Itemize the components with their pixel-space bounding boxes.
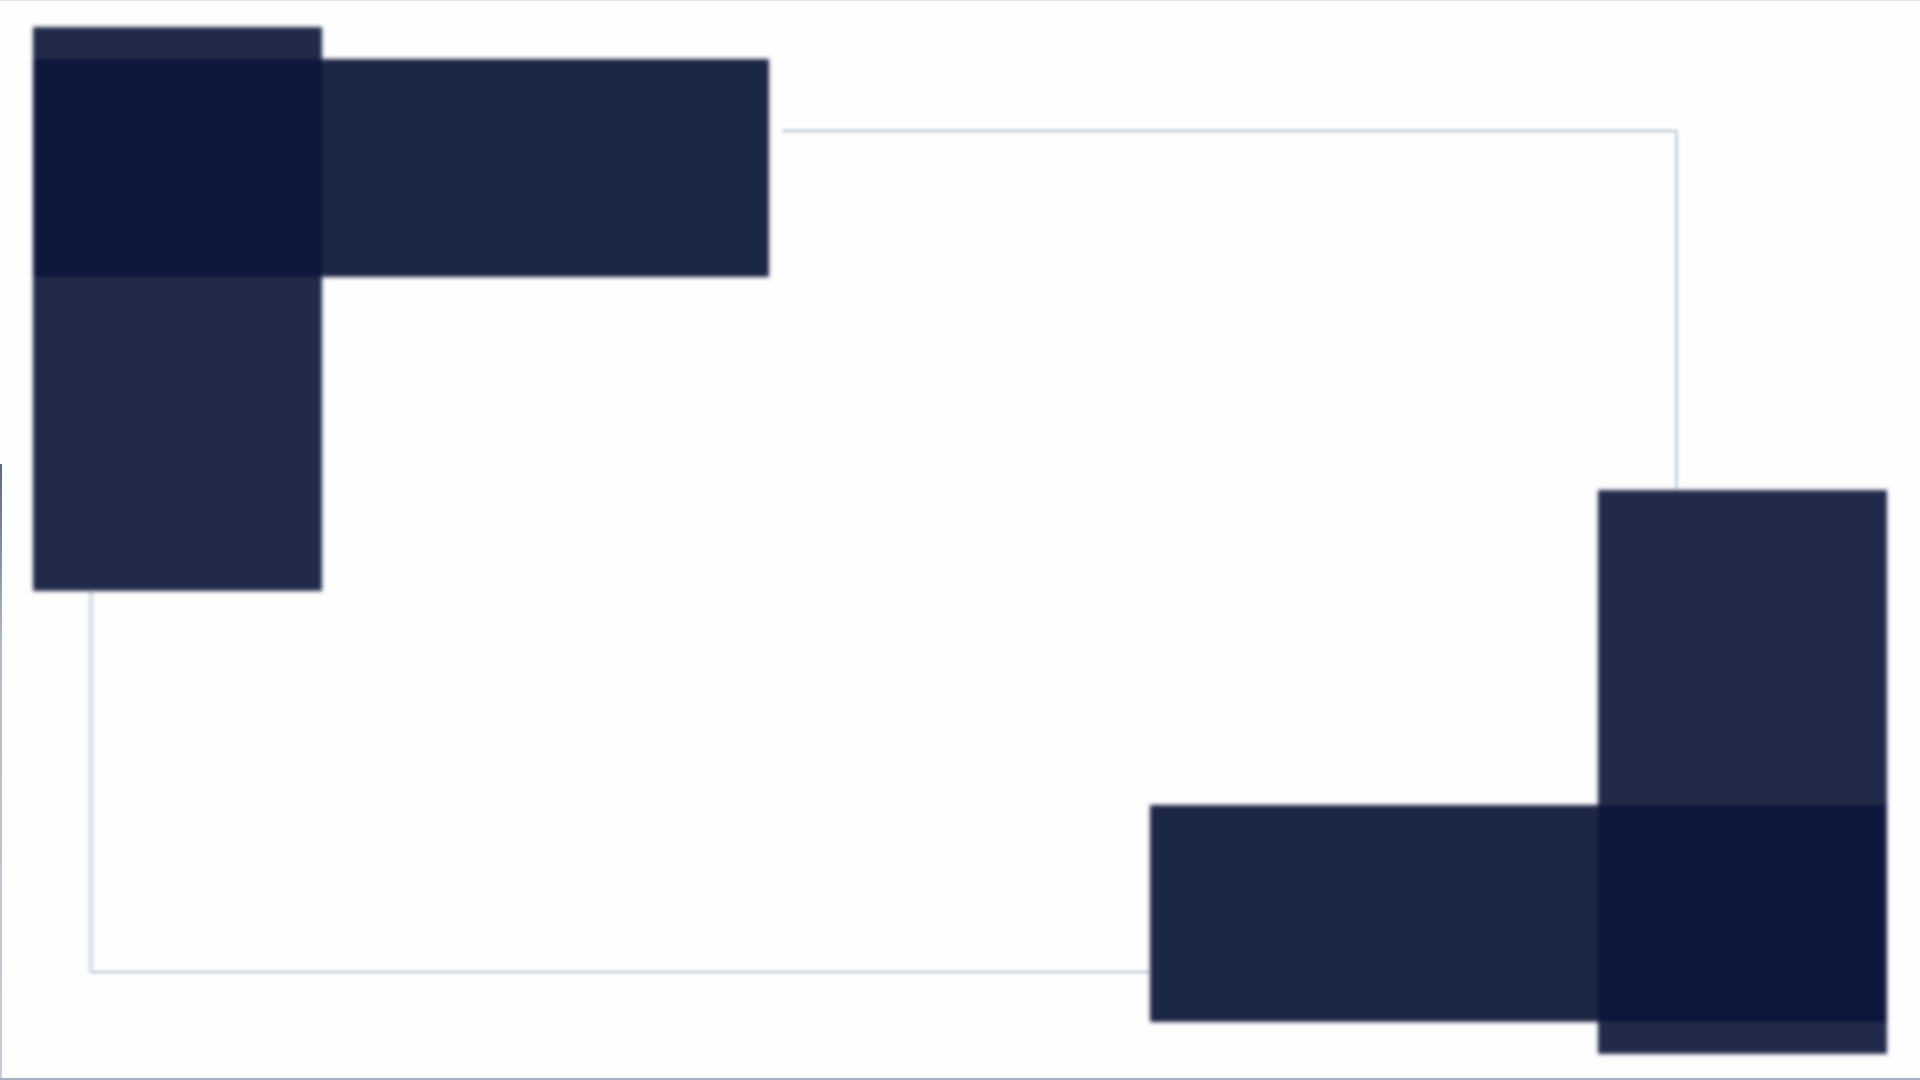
horizontal bar, bottom right	[1150, 805, 1598, 1022]
bottom-right corner block	[1150, 490, 1887, 1054]
top edge line	[0, 0, 1920, 1]
vertical bar, bottom right	[1598, 490, 1887, 1054]
horizontal bar, top left	[322, 59, 769, 277]
vertical bar, top left	[33, 27, 322, 591]
frame left edge	[88, 591, 94, 972]
left edge sliver	[0, 464, 2, 1080]
frame right edge	[1675, 130, 1678, 488]
bottom edge band	[0, 1078, 1920, 1080]
thin outline frame	[90, 130, 1677, 972]
overlap square, bottom right	[1598, 805, 1887, 1022]
top-left corner block	[33, 27, 769, 591]
overlap square, top left	[33, 59, 322, 277]
frame top edge	[782, 129, 1677, 133]
frame bottom edge	[90, 970, 1150, 974]
